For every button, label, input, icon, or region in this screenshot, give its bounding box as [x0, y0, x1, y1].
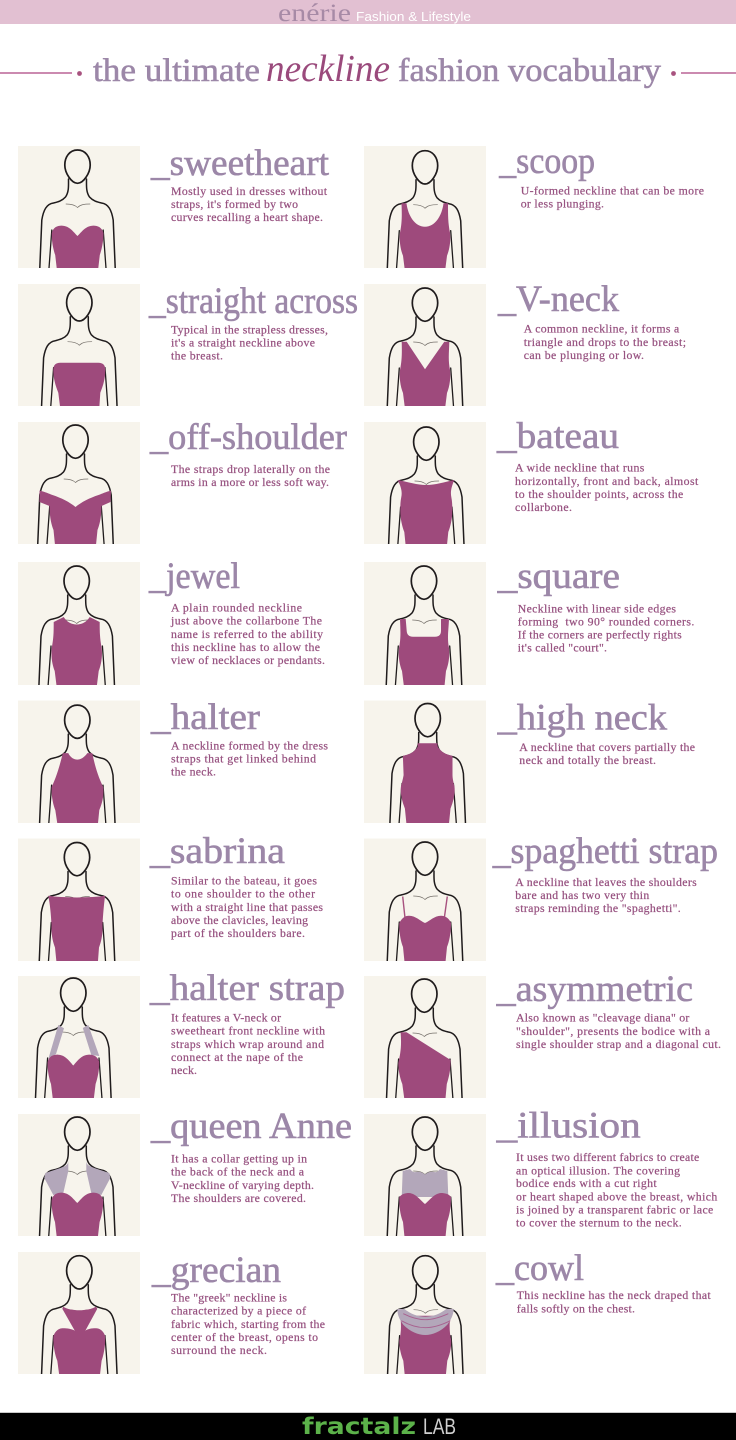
- description: off-shoulder: The straps drop laterally on the: [171, 462, 330, 476]
- heading: sabrina: _sabrina: [149, 831, 285, 872]
- description: bateau: horizontally, front and back, almost: [515, 474, 699, 488]
- footer band: [0, 1412, 736, 1440]
- footer lab label: LAB: [423, 1414, 456, 1439]
- description: bateau: A wide neckline that runs: [515, 461, 645, 475]
- heading: queen Anne: _queen Anne: [150, 1106, 352, 1147]
- description: grecian: The "greek" neckline is: [171, 1291, 287, 1305]
- description: halter strap: neck.: [171, 1063, 197, 1077]
- description: halter: straps that get linked behind: [171, 751, 316, 765]
- title: the ultimate: [93, 53, 260, 89]
- illustration: straight across neckline: [18, 284, 140, 406]
- panel: scoop: [364, 141, 704, 276]
- heading: jewel: _jewel: [148, 556, 240, 597]
- illustration: scoop neckline: [364, 146, 486, 268]
- description: halter strap: straps which wrap around and: [171, 1037, 324, 1051]
- description: bateau: to the shoulder points, across the: [515, 487, 683, 501]
- heading: V-neck: _V-neck: [497, 279, 619, 320]
- description: scoop: or less plunging.: [521, 196, 604, 210]
- description: asymmetric: [516, 1011, 721, 1051]
- description: grecian: characterized by a piece of: [171, 1304, 306, 1318]
- heading: grecian: _grecian: [151, 1250, 281, 1291]
- illustration: queen Anne neckline: [18, 1114, 140, 1236]
- description: halter: [171, 738, 328, 778]
- description: queen Anne: [171, 1152, 314, 1205]
- description: queen Anne: It has a collar getting up in: [171, 1152, 307, 1166]
- description: grecian: center of the breast, opens to: [171, 1330, 318, 1344]
- description: sweetheart: curves recalling a heart shape.: [171, 210, 323, 224]
- description: high neck: neck and totally the breast.: [519, 753, 656, 767]
- description: illusion: is joined by a transparent fabric or lace: [516, 1202, 713, 1216]
- description: square: [518, 601, 694, 654]
- heading: bateau: _bateau: [496, 416, 619, 457]
- illustration: asymmetric neckline: [364, 976, 486, 1098]
- description: straight across: [171, 322, 328, 362]
- description: halter: A neckline formed by the dress: [171, 738, 328, 752]
- description: high neck: [519, 740, 695, 767]
- description: sabrina: Similar to the bateau, it goes: [171, 874, 317, 888]
- illustration: halter strap neckline: [18, 976, 140, 1098]
- description: square: Neckline with linear side edges: [518, 601, 676, 615]
- heading: halter: _halter: [150, 697, 260, 738]
- description: V-neck: [524, 322, 686, 362]
- heading: spaghetti strap: _spaghetti strap: [492, 831, 718, 872]
- description: V-neck: triangle and drops to the breast;: [524, 335, 686, 349]
- description: jewel: A plain rounded neckline: [171, 601, 302, 615]
- description: halter strap: sweetheart front neckline with: [171, 1024, 325, 1038]
- title: neckline: [266, 48, 390, 90]
- panel: asymmetric: [364, 969, 721, 1104]
- description: illusion: to cover the sternum to the neck.: [516, 1216, 682, 1230]
- description: sabrina: to one shoulder to the other: [171, 886, 315, 900]
- description: grecian: surround the neck.: [171, 1343, 267, 1357]
- description: halter strap: [171, 1011, 325, 1077]
- illustration: V-neck neckline: [364, 284, 486, 406]
- description: straight across: Typical in the strapless dresses,: [171, 322, 328, 336]
- description: illusion: or heart shaped above the breast, which: [516, 1190, 717, 1204]
- description: square: forming two 90° rounded corners.: [518, 614, 694, 628]
- description: V-neck: A common neckline, it forms a: [524, 322, 680, 336]
- panel: off-shoulder: [18, 417, 347, 550]
- description: scoop: U-formed neckline that can be more: [521, 183, 704, 197]
- illustration: halter neckline: [18, 700, 140, 823]
- illustration: illusion neckline: [364, 1114, 486, 1236]
- description: square: it's called "court".: [518, 640, 607, 654]
- description: spaghetti strap: A neckline that leaves the shoulders: [515, 875, 697, 889]
- illustration: spaghetti strap neckline: [364, 838, 486, 961]
- description: sweetheart: straps, it's formed by two: [171, 197, 298, 211]
- description: sabrina: [171, 874, 323, 940]
- description: illusion: bodice ends with a cut right: [516, 1176, 657, 1190]
- panel: sweetheart: [18, 143, 330, 275]
- brand name: enérie: [278, 0, 351, 27]
- description: queen Anne: V-neckline of varying depth.: [171, 1178, 314, 1192]
- heading: scoop: _scoop: [498, 141, 595, 182]
- illustration: jewel neckline: [18, 562, 140, 685]
- panel: queen Anne: [18, 1106, 352, 1242]
- description: grecian: [171, 1291, 325, 1357]
- description: asymmetric: "shoulder", presents the bodice with a: [516, 1024, 711, 1038]
- description: jewel: name is referred to the ability: [171, 627, 323, 641]
- description: spaghetti strap: straps reminding the "spaghetti".: [515, 901, 681, 915]
- description: grecian: fabric which, starting from the: [171, 1317, 325, 1331]
- description: sabrina: above the clavicles, leaving: [171, 913, 308, 927]
- panel: straight across: [18, 281, 358, 413]
- panel: V-neck: [364, 279, 686, 413]
- illustration: square neckline: [364, 562, 486, 685]
- description: illusion: [516, 1150, 717, 1230]
- panel: cowl: [364, 1248, 711, 1381]
- heading: asymmetric: _asymmetric: [496, 969, 693, 1010]
- description: cowl: [517, 1288, 711, 1315]
- heading: straight across: _straight across: [148, 281, 358, 322]
- description: illusion: It uses two different fabrics to create: [516, 1150, 699, 1164]
- description: jewel: just above the collarbone The: [170, 614, 322, 628]
- panel: bateau: [364, 416, 699, 552]
- description: halter: the neck.: [171, 764, 216, 778]
- brand tagline: Fashion & Lifestyle: [356, 9, 471, 24]
- description: sabrina: with a straight line that passes: [171, 900, 323, 914]
- description: square: If the corners are perfectly rights: [518, 628, 682, 642]
- panel: square: [364, 556, 694, 691]
- description: halter strap: It features a V-neck or: [171, 1011, 281, 1025]
- description: spaghetti strap: [515, 875, 697, 915]
- panel: halter strap: [18, 968, 345, 1103]
- description: off-shoulder: [171, 462, 330, 489]
- illustration: cowl neckline: [364, 1252, 486, 1374]
- illustration: sabrina neckline: [18, 838, 140, 961]
- heading: high neck: _high neck: [497, 698, 668, 739]
- panel: halter: [18, 697, 328, 830]
- illustration: off-shoulder neckline: [18, 422, 140, 544]
- illustration: grecian neckline: [18, 1252, 140, 1374]
- description: high neck: A neckline that covers partially the: [519, 740, 695, 754]
- description: V-neck: can be plunging or low.: [524, 348, 644, 362]
- illustration: sweetheart neckline: [18, 146, 140, 268]
- description: jewel: view of necklaces or pendants.: [171, 653, 325, 667]
- illustration: high neck: [364, 700, 486, 823]
- title: fashion vocabulary: [398, 53, 662, 89]
- description: sweetheart: Mostly used in dresses without: [171, 184, 328, 198]
- heading: cowl: _cowl: [495, 1248, 584, 1289]
- description: spaghetti strap: bare and has two very thin: [515, 888, 649, 902]
- description: sabrina: part of the shoulders bare.: [171, 926, 305, 940]
- description: halter strap: connect at the nape of the: [171, 1050, 303, 1064]
- description: asymmetric: Also known as "cleavage diana" or: [516, 1011, 689, 1025]
- heading: square: _square: [497, 556, 620, 597]
- panel: sabrina: [18, 831, 323, 968]
- panel: high neck: [364, 698, 695, 828]
- panel: illusion: [364, 1106, 717, 1242]
- description: straight across: the breast.: [171, 348, 223, 362]
- description: jewel: [170, 601, 325, 667]
- panel: jewel: [18, 556, 325, 691]
- description: bateau: [515, 461, 699, 514]
- description: straight across: it's a straight neckline above: [171, 336, 315, 350]
- heading: halter strap: _halter strap: [149, 968, 345, 1009]
- heading: off-shoulder: _off-shoulder: [149, 417, 347, 458]
- header band: [0, 0, 736, 27]
- panel: grecian: [18, 1250, 325, 1381]
- footer logo: fractalz: [302, 1414, 416, 1440]
- panel: spaghetti strap: [364, 831, 718, 967]
- heading: illusion: _illusion: [496, 1106, 641, 1147]
- description: asymmetric: single shoulder strap and a diagonal cut.: [516, 1037, 721, 1051]
- illustration: bateau neckline: [364, 422, 486, 544]
- description: off-shoulder: arms in a more or less soft way.: [171, 475, 329, 489]
- description: illusion: an optical illusion. The covering: [516, 1163, 680, 1177]
- description: cowl: This neckline has the neck draped that: [517, 1288, 711, 1302]
- title: [0, 48, 736, 90]
- description: bateau: collarbone.: [515, 500, 572, 514]
- description: jewel: this neckline has to allow the: [171, 640, 320, 654]
- description: sweetheart: [171, 184, 328, 224]
- description: queen Anne: the back of the neck and a: [171, 1164, 305, 1178]
- heading: sweetheart: _sweetheart: [150, 143, 330, 184]
- description: cowl: falls softly on the chest.: [517, 1301, 635, 1315]
- description: queen Anne: The shoulders are covered.: [171, 1191, 306, 1205]
- description: scoop: [521, 183, 704, 210]
